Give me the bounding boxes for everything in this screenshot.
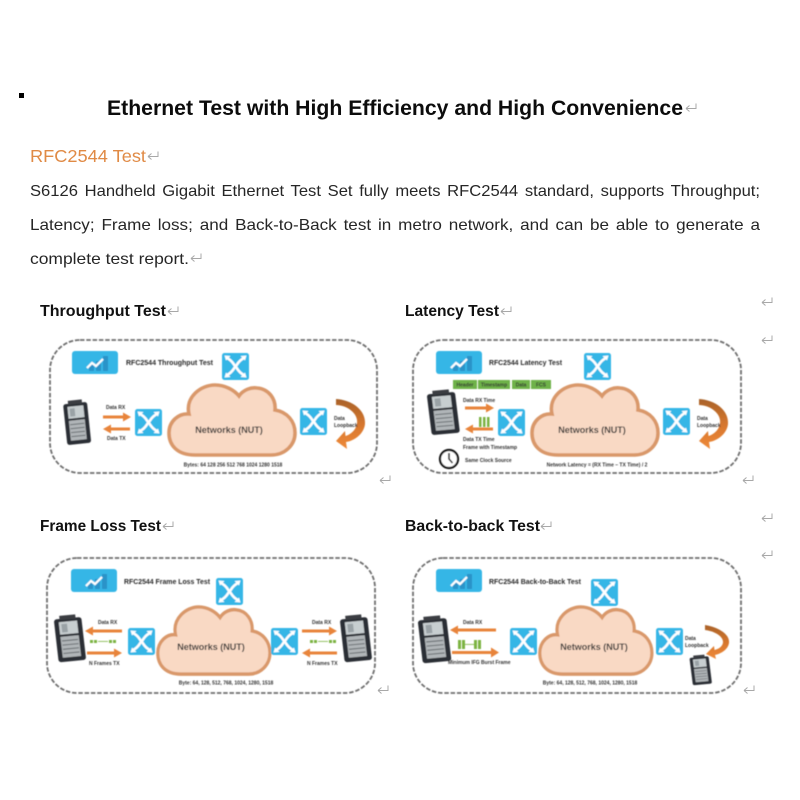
panel: latency test diagram [413,340,741,473]
loopback arrow [705,625,729,659]
panel: back-to-back test diagram: Networks (NUT) [560,642,628,652]
panel: back-to-back test diagram: Minimum IFG Burst Frame [448,660,511,666]
panel: frame loss test diagram: Byte: 64, 128, 512, 768, 1024, 1280, 1518 [179,680,273,686]
panel: latency test diagram: Frame with Timestamp [463,445,517,451]
panel: throughput test diagram: Data TX [107,436,126,442]
panel: latency test diagram: Networks (NUT) [558,425,626,435]
panel: back-to-back test diagram: Data [685,636,696,642]
intro text [30,183,760,268]
section heading: RFC2544 Test [30,146,146,166]
intro text: S6126 Handheld Gigabit Ethernet Test Set fully meets RFC2544 standard, supports Throughput; [30,183,760,200]
paragraph marks [148,104,772,694]
frame fields: Timestamp [481,382,507,388]
title: Ethernet Test with High Efficiency and High Convenience [107,97,683,120]
panel: back-to-back test diagram [413,558,741,693]
heading: frame loss: Frame Loss Test [40,518,162,535]
panel: latency test diagram: Network Latency = (RX Time – TX Time) / 2 [547,462,648,468]
panel: latency test diagram: Data TX Time [463,437,495,443]
panel: frame loss test diagram: RFC2544 Frame Loss Test [124,577,210,586]
burst frames [458,640,481,649]
panel: throughput test diagram: Data RX [106,405,126,411]
intro text: complete test report. [30,251,189,268]
panel: latency test diagram: Data [697,416,708,422]
panel: frame loss test diagram: Data RX [312,620,332,626]
frame fields: Data [516,382,527,388]
panel: back-to-back test diagram: RFC2544 Back-to-Back Test [489,577,581,586]
panel: latency test diagram: RFC2544 Latency Test [489,358,562,367]
frame bursts [90,640,336,643]
panel: latency test diagram: Data RX Time [463,398,495,404]
panel: frame loss test diagram: Data RX [98,620,118,626]
frame fields: FCS [536,382,547,388]
panel: frame loss test diagram: Networks (NUT) [177,642,245,652]
icon: clock [440,450,458,468]
panel: latency test diagram: Loopback [697,423,721,429]
panel: throughput test diagram: Bytes: 64 128 256 512 768 1024 1280 1518 [184,462,283,468]
heading: back-to-back: Back-to-back Test [405,518,541,535]
panel: frame loss test diagram: N Frames TX [307,661,338,667]
panel: frame loss test diagram: N Frames TX [89,661,120,667]
panel: frame loss test diagram [47,558,375,693]
frame fields [453,380,551,389]
frame fields: Header [457,382,474,388]
heading: latency: Latency Test [405,303,500,320]
heading: throughput: Throughput Test [40,303,167,320]
panel: latency test diagram: Same Clock Source [465,458,512,464]
panel: throughput test diagram: Data [334,416,345,422]
panel: throughput test diagram [50,340,377,473]
panel: back-to-back test diagram: Data RX [463,620,483,626]
intro text: Latency; Frame loss; and Back-to-Back test in metro network, and can be able to generate a [30,217,760,234]
panel: throughput test diagram: RFC2544 Throughput Test [126,358,213,367]
bullet marker [19,93,24,98]
panel: back-to-back test diagram: Byte: 64, 128, 512, 768, 1024, 1280, 1518 [543,680,637,686]
panel: throughput test diagram: Networks (NUT) [195,425,263,435]
panel: back-to-back test diagram: Loopback [685,643,709,649]
panel: throughput test diagram: Loopback [334,423,358,429]
